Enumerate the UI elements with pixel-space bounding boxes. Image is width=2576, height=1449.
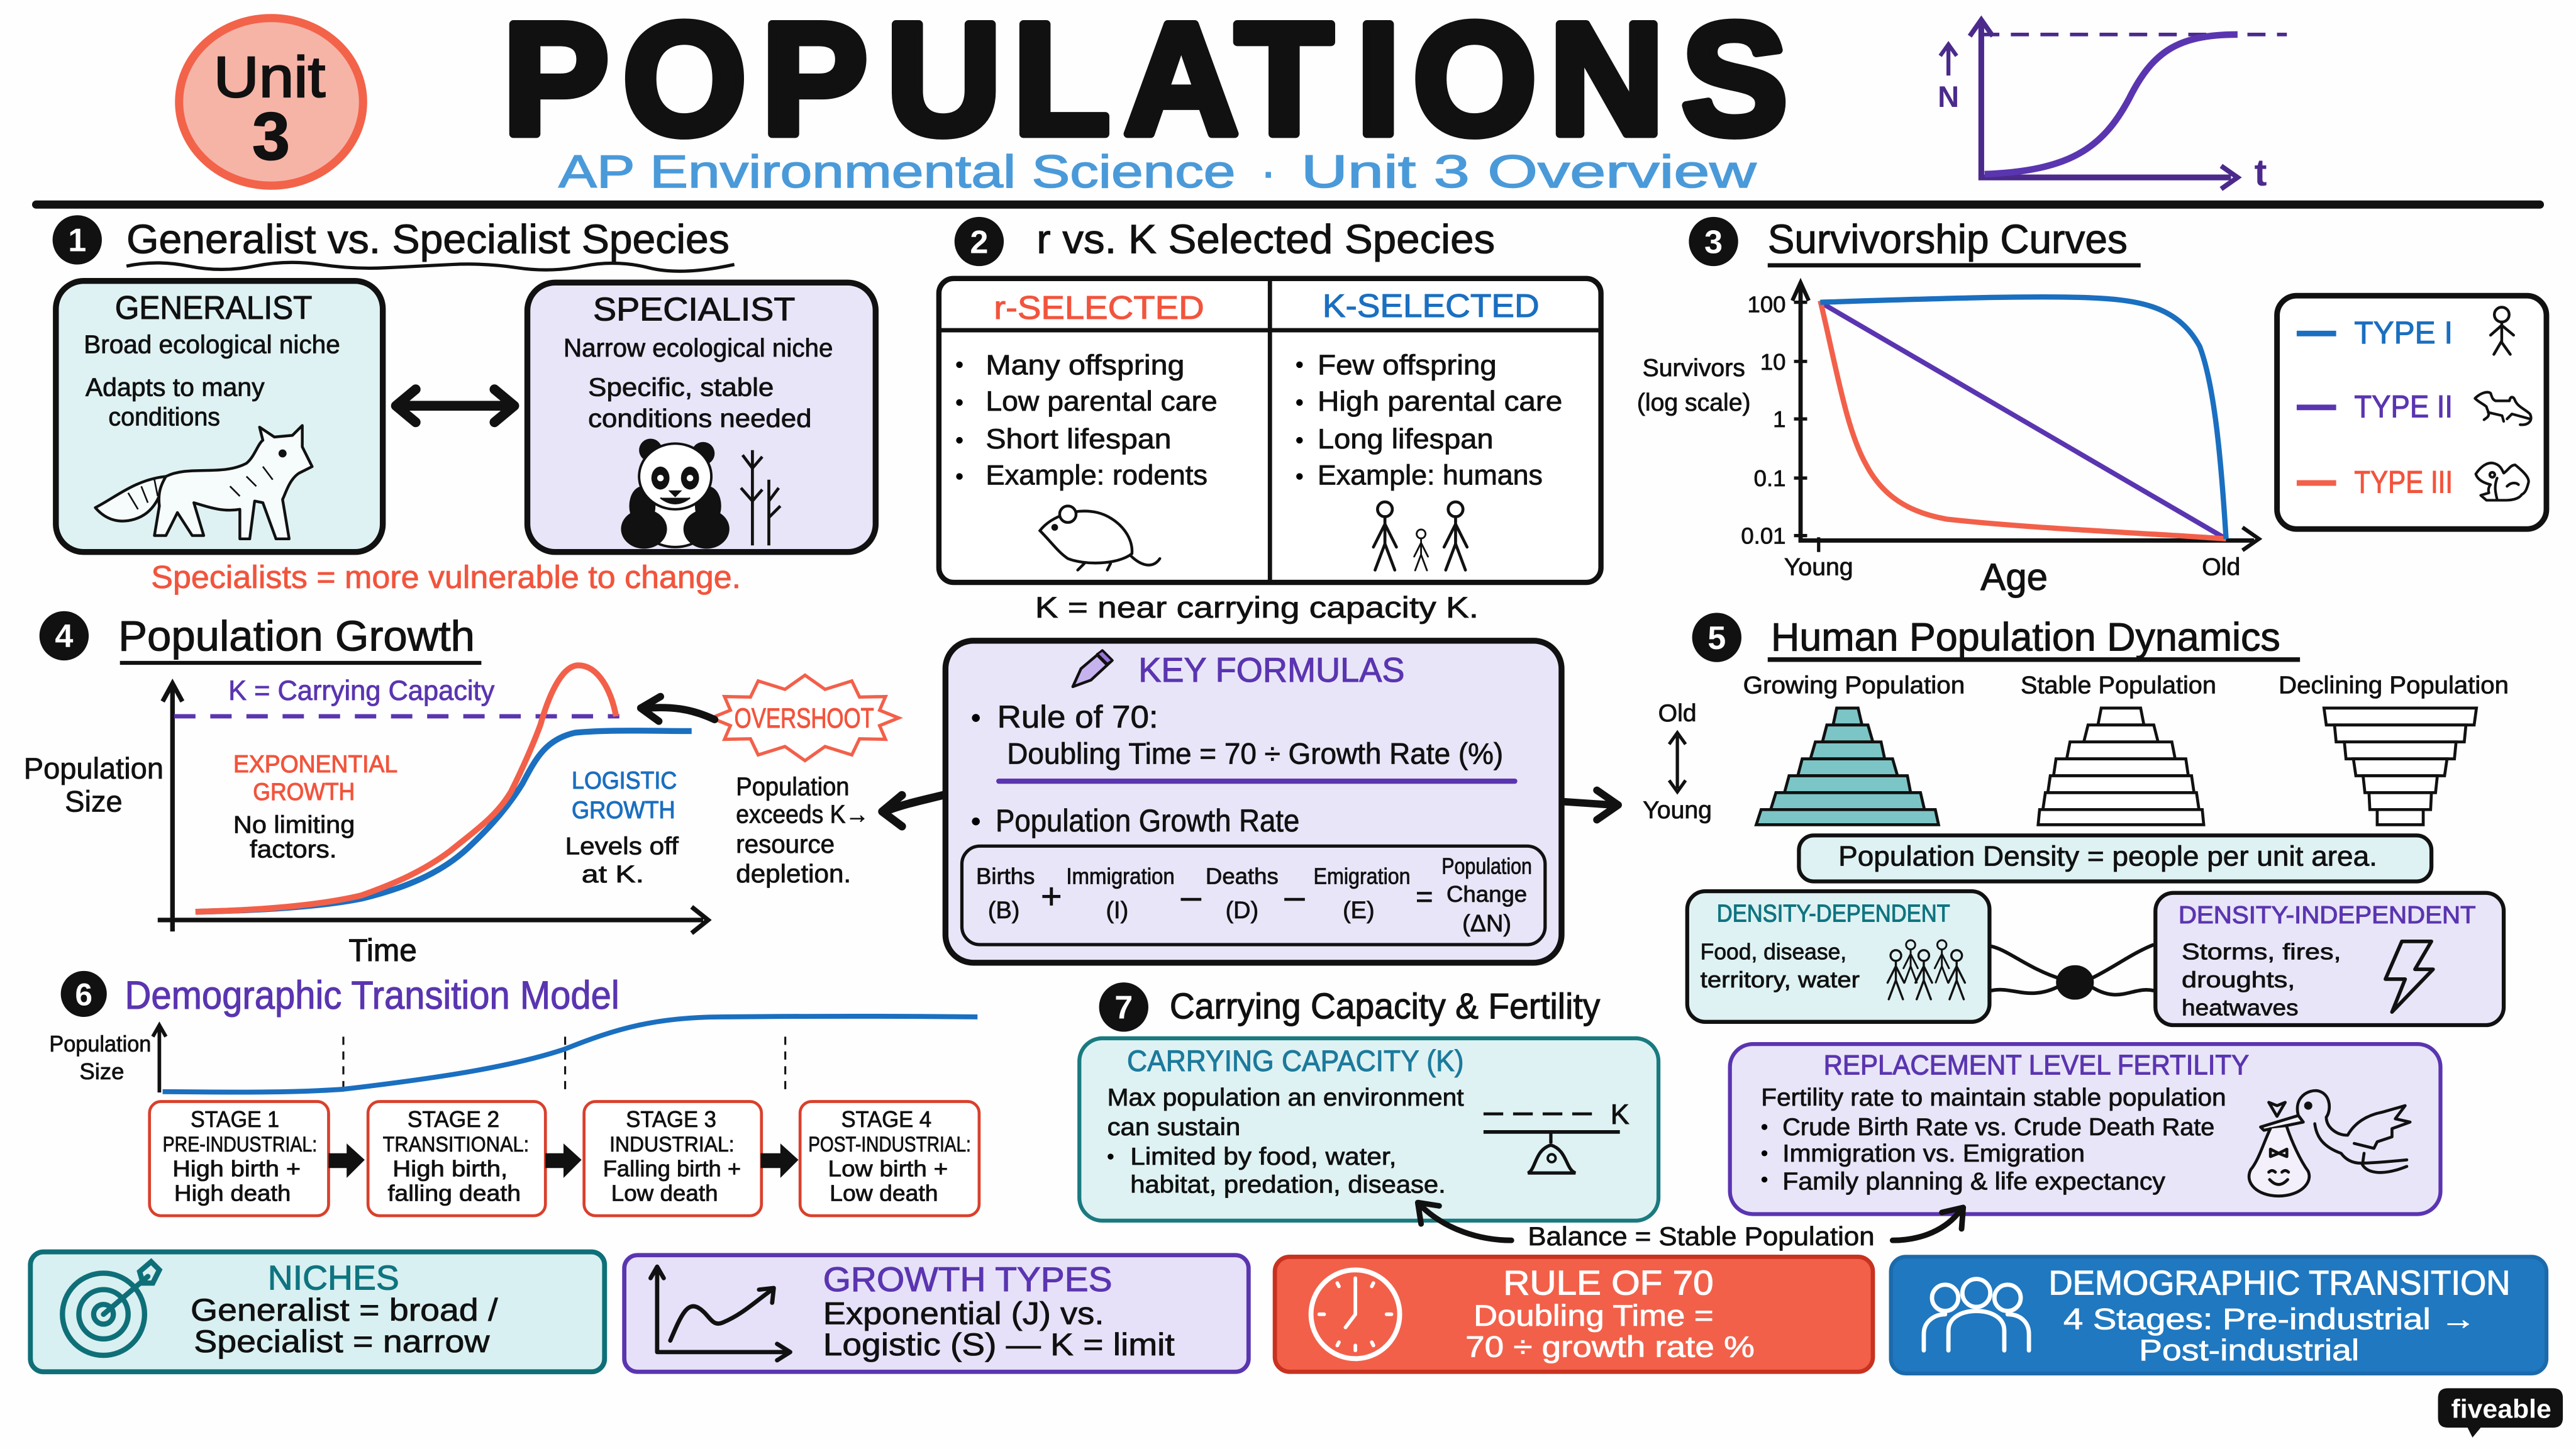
icon: lightning — [2385, 941, 2433, 1012]
panel: carrying capacity: Max population an environment — [1108, 1084, 1464, 1111]
text: overshoot explanation: Population — [736, 772, 850, 801]
chart: growth curves: GROWTH — [572, 797, 675, 824]
subtitle — [558, 147, 1757, 197]
chart: growth curves: K = Carrying Capacity — [228, 675, 495, 706]
icon: frog — [2476, 463, 2529, 500]
icon: target — [62, 1262, 159, 1355]
panel: generalist: GENERALIST — [115, 290, 312, 326]
panel: density-independent: heatwaves — [2182, 994, 2299, 1020]
formula: population change: + — [1041, 877, 1062, 917]
chart: survivorship: 0.01 — [1741, 523, 1786, 549]
logo: fiveable — [2438, 1388, 2563, 1438]
icon: stork with baby — [2249, 1091, 2410, 1196]
table: r vs K: r-SELECTED — [994, 290, 1204, 326]
icon: scale with K — [1484, 1099, 1629, 1173]
section badge 6: 6 — [75, 977, 92, 1013]
panel: specialist — [528, 282, 875, 552]
section badge 2 — [955, 217, 1004, 266]
callout: population density — [1799, 835, 2431, 881]
formula: population change: – — [1284, 877, 1304, 917]
formula: population change: Immigration — [1066, 863, 1175, 889]
card: niches: Generalist = broad / — [191, 1292, 498, 1328]
panel: replacement level fertility: Immigration vs. Emigration — [1782, 1140, 2085, 1167]
chart: growth curves: Time — [348, 933, 417, 968]
panel: specialist: conditions needed — [588, 404, 811, 433]
card: growth types: Logistic (S) — K = limit — [823, 1327, 1175, 1362]
table: r vs K: High parental care — [1318, 386, 1562, 417]
panel: density-independent — [2155, 893, 2504, 1025]
text: overshoot explanation: depletion. — [736, 859, 851, 888]
subtitle: · — [1260, 147, 1276, 197]
connector: density factors — [1991, 945, 2154, 1000]
panel: carrying capacity: can sustain — [1108, 1114, 1240, 1141]
panel: stage 3: INDUSTRIAL: — [609, 1133, 735, 1157]
subtitle: AP Environmental Science — [558, 147, 1235, 197]
panel: key formulas: Rule of 70: — [997, 699, 1158, 735]
chart: growth curves: Levels off — [565, 833, 679, 860]
section 2: r vs K — [939, 216, 1601, 624]
icon: human — [2490, 307, 2514, 354]
panel: specialist: Specific, stable — [588, 373, 774, 402]
legend: curve types: TYPE I — [2354, 315, 2453, 350]
card: niches: Specialist = narrow — [194, 1324, 490, 1359]
heading 6: Demographic Transition Model — [125, 974, 619, 1018]
icon: scale with K: K — [1611, 1099, 1629, 1130]
table: r vs K: Few offspring — [1318, 350, 1497, 381]
arrow: formulas to human dynamics — [1564, 790, 1618, 820]
formula: population change: Population — [1441, 853, 1532, 879]
legend: curve types: TYPE II — [2354, 389, 2453, 425]
formula: population change — [962, 846, 1545, 945]
panel: stage 1: PRE-INDUSTRIAL: — [163, 1133, 317, 1157]
panel: carrying capacity — [1079, 1038, 1658, 1221]
callout: population density: Population Density = people per unit area. — [1838, 841, 2377, 872]
table: r vs K: Many offspring — [985, 350, 1184, 381]
panel: generalist: Adapts to many — [86, 373, 265, 402]
formula: population change: – — [1181, 877, 1201, 917]
formula: population change: (I) — [1106, 897, 1128, 924]
section badge 1: 1 — [68, 223, 86, 259]
header rule — [36, 203, 2540, 206]
panel: stage 4 — [800, 1102, 979, 1216]
panel: stage 1: STAGE 1 — [191, 1106, 279, 1132]
chart: growth curves: LOGISTIC — [572, 767, 677, 794]
formula: population change: (B) — [988, 897, 1019, 924]
card: demographic transition — [1891, 1257, 2546, 1374]
text: overshoot explanation: exceeds K→ — [736, 800, 869, 829]
panel: replacement level fertility: Fertility rate to maintain stable population — [1761, 1084, 2226, 1111]
section badge 1 — [53, 215, 102, 265]
card: rule of 70: Doubling Time = — [1474, 1299, 1714, 1332]
text: overshoot explanation — [736, 772, 869, 888]
icon: logistic growth chart: t — [2254, 152, 2267, 194]
table: r vs K: Example: humans — [1318, 460, 1543, 491]
table: r vs K: Example: rodents — [985, 460, 1208, 491]
card: demographic transition: 4 Stages: Pre-industrial → — [2063, 1302, 2476, 1335]
subtitle: Unit 3 Overview — [1301, 147, 1757, 197]
section 5: human population dynamics — [1643, 613, 2509, 1025]
panel: generalist: Broad ecological niche — [84, 330, 340, 359]
panel: key formulas: Population Growth Rate — [996, 803, 1299, 838]
icon: logistic growth chart: N — [1938, 80, 1959, 113]
panel: replacement level fertility: Crude Birth Rate vs. Crude Death Rate — [1782, 1114, 2214, 1141]
chart: survivorship: (log scale) — [1637, 389, 1751, 416]
icon: lizard — [2475, 392, 2531, 425]
section 3: survivorship curves — [1637, 216, 2546, 598]
chart: survivorship: 1 — [1773, 406, 1786, 432]
chart: growing pyramid: Growing Population — [1743, 672, 1965, 699]
section badge 3 — [1689, 217, 1738, 266]
panel: stage 2: STAGE 2 — [408, 1106, 499, 1132]
panel: stage 1: High death — [174, 1180, 291, 1206]
panel: density-independent: DENSITY-INDEPENDENT — [2179, 902, 2476, 929]
chart: growing pyramid — [1743, 672, 1965, 824]
section 1: generalist vs specialist — [53, 215, 875, 595]
chart: growth curves: factors. — [250, 836, 337, 863]
badge: Unit 3 — [179, 18, 363, 186]
chart: survivorship: 0.1 — [1754, 465, 1786, 491]
badge: Unit 3: 3 — [252, 98, 290, 174]
chart: growth curves — [24, 665, 708, 968]
chart: survivorship — [1637, 282, 2259, 598]
icon: panda and bamboo — [621, 438, 780, 548]
panel: stage 4: POST-INDUSTRIAL: — [808, 1133, 971, 1157]
section badge 3: 3 — [1704, 224, 1723, 260]
panel: stage 2: TRANSITIONAL: — [383, 1133, 529, 1157]
section badge 2: 2 — [970, 224, 988, 260]
panel: carrying capacity: CARRYING CAPACITY (K) — [1127, 1044, 1464, 1077]
panel: replacement level fertility: REPLACEMENT LEVEL FERTILITY — [1824, 1050, 2249, 1080]
panel: stage 3: STAGE 3 — [626, 1106, 716, 1132]
panel: density-dependent — [1687, 891, 1989, 1022]
panel: generalist — [56, 281, 383, 552]
section badge 5 — [1692, 613, 1741, 662]
card: growth types: Exponential (J) vs. — [823, 1296, 1104, 1331]
arrows: stage flow — [328, 1143, 799, 1178]
formula: population change: (E) — [1343, 897, 1375, 924]
icon: mouse — [1040, 506, 1160, 570]
section badge 7 — [1099, 982, 1148, 1031]
table: r vs K: Short lifespan — [985, 424, 1172, 455]
age axis label: Old — [1658, 700, 1697, 727]
heading 3: Survivorship Curves — [1768, 216, 2128, 262]
chart: survivorship: Young — [1784, 553, 1853, 580]
panel: density-dependent: Food, disease, — [1701, 939, 1846, 965]
formula: population change: = — [1416, 880, 1433, 913]
panel: density-independent: Storms, fires, — [2182, 939, 2341, 965]
chart: growth curves: Population — [24, 752, 164, 785]
table: r vs K — [939, 279, 1601, 582]
age axis label: Young — [1643, 797, 1712, 824]
heading 1: Generalist vs. Specialist Species — [126, 216, 730, 262]
table: r vs K: K-SELECTED — [1323, 288, 1540, 325]
icon: fox — [96, 426, 312, 539]
section badge 4 — [40, 611, 89, 660]
icon: pencil — [1073, 650, 1112, 687]
chart: population size curve: Size — [79, 1058, 125, 1084]
icon: logistic growth chart — [1938, 19, 2287, 194]
icon: three people — [1924, 1279, 2029, 1350]
section badge 4: 4 — [55, 618, 73, 655]
heading 5: Human Population Dynamics — [1771, 615, 2280, 659]
chart: growth curves: Size — [65, 784, 123, 818]
panel: replacement level fertility: Family planning & life expectancy — [1782, 1168, 2165, 1195]
panel: key formulas — [945, 641, 1562, 963]
chart: declining pyramid: Declining Population — [2279, 672, 2509, 699]
arrow: double-headed — [396, 389, 514, 422]
panel: density-independent: droughts, — [2182, 967, 2295, 992]
legend: curve types — [2277, 296, 2546, 529]
panel: stage 4: Low death — [830, 1180, 938, 1206]
chart: survivorship: Survivors — [1643, 355, 1745, 382]
card: demographic transition: DEMOGRAPHIC TRANSITION — [2048, 1263, 2511, 1302]
panel: key formulas: KEY FORMULAS — [1138, 650, 1404, 689]
panel: stage 2 — [368, 1102, 545, 1216]
age axis label — [1643, 700, 1712, 824]
card: rule of 70: 70 ÷ growth rate % — [1465, 1330, 1755, 1363]
card: growth types: GROWTH TYPES — [823, 1260, 1112, 1299]
card: niches — [30, 1252, 604, 1372]
heading 4: Population Growth — [118, 613, 475, 660]
callout: overshoot: OVERSHOOT — [735, 703, 874, 734]
card: rule of 70: RULE OF 70 — [1503, 1263, 1714, 1302]
panel: stage 3: Low death — [611, 1180, 718, 1206]
chart: population size curve — [49, 1016, 977, 1092]
card: niches: NICHES — [268, 1258, 399, 1297]
formula: population change: Births — [976, 863, 1035, 889]
panel: stage 2: falling death — [387, 1180, 521, 1206]
icon: human family — [1374, 502, 1467, 570]
legend: curve types: TYPE III — [2354, 465, 2453, 500]
callout: specialists vulnerable: Specialists = more vulnerable to change. — [151, 559, 741, 595]
chart: growth curves: EXPONENTIAL — [233, 751, 397, 778]
panel: carrying capacity: habitat, predation, disease. — [1130, 1171, 1446, 1198]
label: balance with arrows — [1418, 1202, 1963, 1251]
formula: population change: Change — [1446, 881, 1527, 907]
text: overshoot explanation: resource — [736, 830, 835, 858]
chart: stable pyramid: Stable Population — [2021, 672, 2216, 699]
logo: fiveable: fiveable — [2451, 1394, 2551, 1423]
panel: stage 3: Falling birth + — [603, 1155, 741, 1181]
label: balance with arrows: Balance = Stable Population — [1528, 1221, 1875, 1251]
table: r vs K: Low parental care — [985, 386, 1218, 417]
chart: growth curves: at K. — [582, 861, 644, 888]
panel: replacement level fertility — [1730, 1044, 2440, 1214]
panel: density-dependent: DENSITY-DEPENDENT — [1717, 900, 1950, 927]
section 4: population growth — [24, 611, 943, 968]
arrow: overshoot to curve — [641, 697, 714, 721]
arrow: formulas to overshoot — [882, 795, 943, 826]
chart: survivorship: Age — [1980, 556, 2048, 598]
chart: population size curve: Population — [49, 1031, 151, 1057]
card: growth types — [625, 1255, 1248, 1372]
panel: stage 2: High birth, — [392, 1155, 508, 1181]
formula: population change: (D) — [1226, 897, 1258, 924]
panel: stage 4: STAGE 4 — [841, 1106, 931, 1132]
section 7: carrying capacity and fertility — [1079, 982, 2440, 1251]
panel: stage 1: High birth + — [172, 1155, 301, 1181]
panel: stage 3 — [584, 1102, 762, 1216]
icon: growth chart — [650, 1267, 790, 1360]
chart: survivorship: Old — [2202, 553, 2240, 580]
formula: population change: Emigration — [1313, 863, 1411, 889]
panel: stage 4: Low birth + — [828, 1155, 948, 1181]
chart: growth curves: GROWTH — [253, 779, 355, 806]
section badge 6 — [61, 971, 107, 1017]
formula: population change: Deaths — [1206, 863, 1279, 889]
panel: stage 1 — [150, 1102, 328, 1216]
panel: specialist: SPECIALIST — [593, 291, 795, 328]
callout: overshoot — [711, 675, 899, 760]
panel: generalist: conditions — [108, 402, 220, 431]
section badge 7: 7 — [1114, 990, 1133, 1026]
panel: specialist: Narrow ecological niche — [564, 333, 833, 362]
chart: declining pyramid — [2279, 672, 2509, 824]
note: K near carrying capacity: K = near carrying capacity K. — [1035, 591, 1479, 624]
icon: clock — [1311, 1270, 1400, 1358]
chart: survivorship: 100 — [1747, 291, 1786, 317]
chart: growth curves: No limiting — [233, 811, 355, 838]
chart: survivorship: 10 — [1760, 349, 1786, 375]
heading 2: r vs. K Selected Species — [1036, 216, 1495, 262]
section 6: demographic transition model — [49, 971, 979, 1216]
table: r vs K: Long lifespan — [1318, 424, 1494, 455]
panel: key formulas: Doubling Time = 70 ÷ Growth Rate (%) — [1007, 737, 1503, 770]
card: rule of 70 — [1275, 1257, 1873, 1372]
panel: density-dependent: territory, water — [1701, 967, 1860, 992]
formula: population change: (ΔN) — [1462, 911, 1511, 937]
badge: Unit 3: Unit — [214, 45, 325, 109]
icon: crowd — [1887, 940, 1965, 999]
heading 7: Carrying Capacity & Fertility — [1170, 987, 1601, 1027]
chart: stable pyramid — [2021, 672, 2216, 824]
card: demographic transition: Post-industrial — [2139, 1333, 2359, 1367]
panel: carrying capacity: Limited by food, water, — [1130, 1143, 1396, 1170]
section badge 5: 5 — [1707, 620, 1726, 657]
